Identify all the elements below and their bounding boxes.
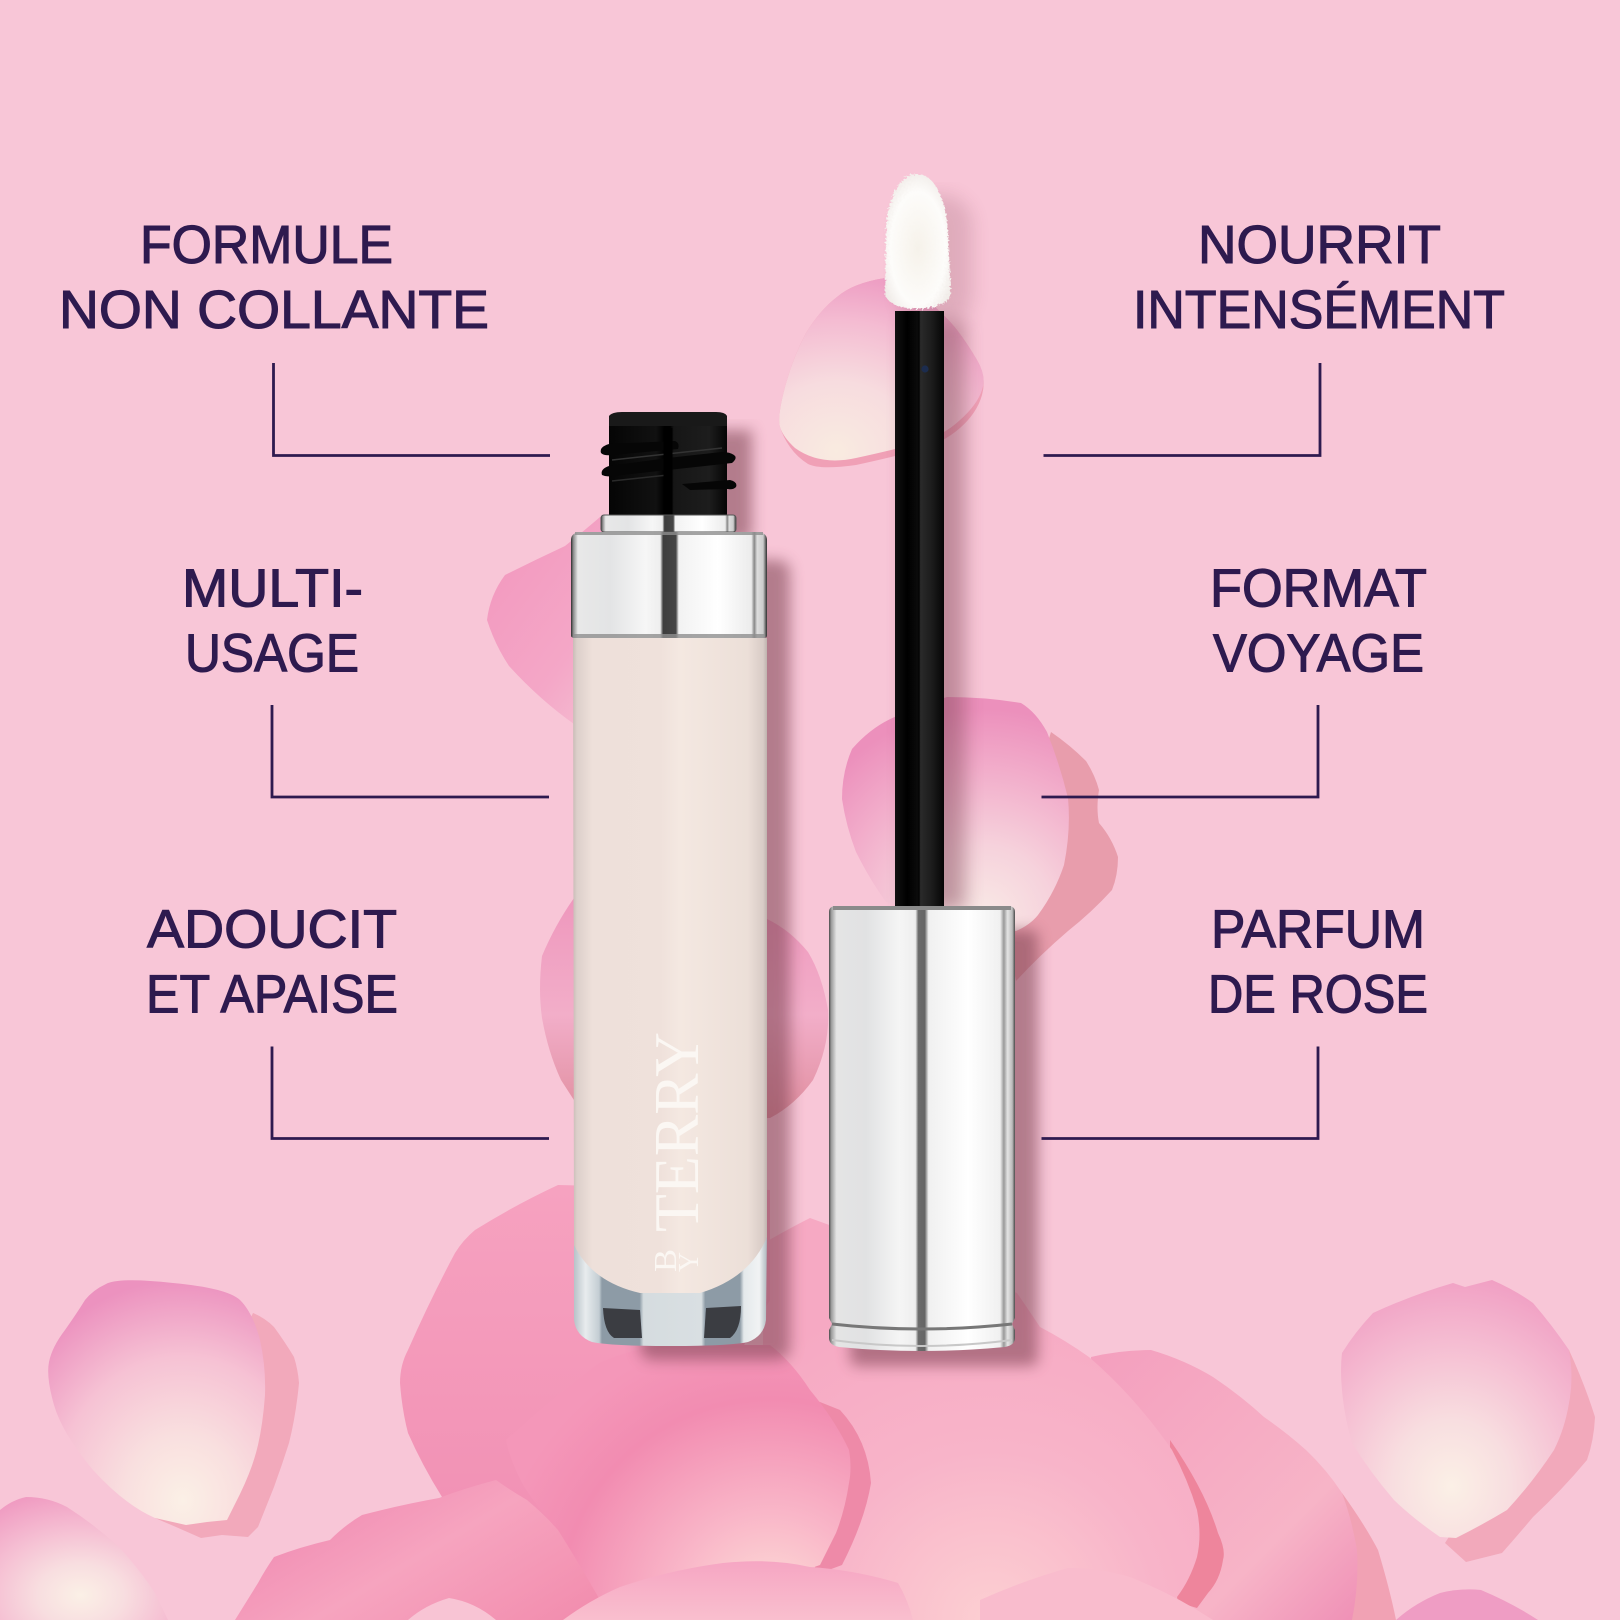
callout: formule non collante: NON COLLANTE [59,280,489,340]
petal: shadow under center petal [815,1400,871,1575]
lip product: bottle [571,412,767,1346]
callout: adoucit et apaise [146,900,549,1138]
callout: formule non collante [59,215,550,456]
callout: adoucit et apaise: ADOUCIT [147,900,397,960]
brand logo: Y [674,1252,705,1272]
brand logo: TERRY [641,1032,712,1232]
applicator tip [885,174,951,309]
chrome ring [601,515,736,532]
petal: bottom right small [1396,1589,1538,1620]
petal: far right back layer [1091,1350,1396,1620]
petal: center pink [506,1345,850,1600]
petal: left of bottle [487,517,640,724]
callout: parfum de rose: PARFUM [1211,900,1425,960]
callout: format voyage: FORMAT [1210,558,1427,618]
cream body [573,638,767,1293]
petal: bottom center light [563,1561,913,1620]
callout: format voyage: VOYAGE [1213,624,1424,684]
callout: nourrit intensement [1044,215,1505,456]
bottle neck with threads [601,412,736,517]
bottle glass base [574,1230,767,1346]
callout: nourrit intensement: NOURRIT [1198,215,1441,275]
petal: right floating [1341,1280,1595,1562]
callout: multi-usage: MULTI- [182,558,363,618]
petal: bottom small pale [408,1598,496,1620]
callout: multi-usage [182,558,549,797]
petal: top behind wand [779,278,984,467]
callout: parfum de rose [1042,900,1428,1138]
chrome collar [571,532,767,638]
callout: formule non collante: FORMULE [140,215,393,275]
lip product: applicator and cap [829,174,1015,1351]
petal: large center-left back [400,1185,770,1560]
petal: large right [760,1218,1200,1620]
callout: format voyage [1042,558,1427,797]
petal: bottom right light [980,1568,1213,1620]
callout: nourrit intensement: INTENSÉMENT [1133,280,1505,340]
cap [829,906,1015,1351]
brand logo: B [647,1249,683,1272]
petal: lower left large [235,1480,625,1620]
petal: left floating [48,1280,299,1538]
product shadows [640,195,1038,1366]
callout: multi-usage: USAGE [185,624,359,684]
petal: lower left of bottle [540,880,828,1125]
petal: crescent shadow between large petals [1170,1440,1224,1608]
callout: adoucit et apaise: ET APAISE [146,964,398,1024]
petal: right of wand [842,697,1118,981]
petal: bottom left [0,1497,168,1620]
callout: parfum de rose: DE ROSE [1208,964,1428,1024]
dark reflections in base [603,1306,741,1338]
wand [895,311,944,911]
